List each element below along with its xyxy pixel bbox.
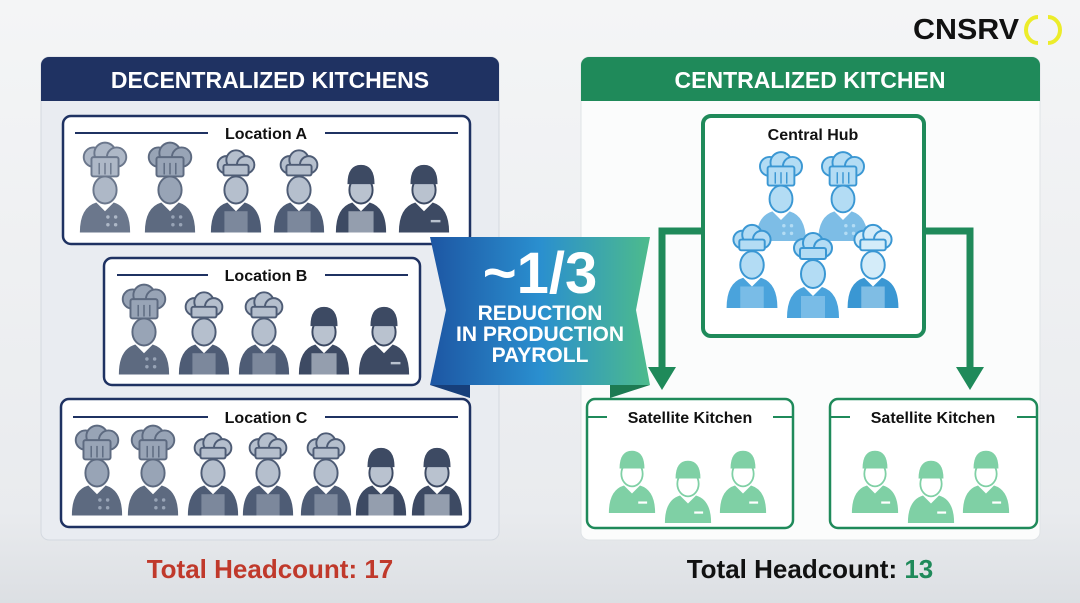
panel: decentralized kitchens (41, 57, 499, 540)
callout: reduction banner: PAYROLL (492, 344, 589, 367)
satellite kitchen 1: Satellite Kitchen (628, 410, 752, 427)
satellite kitchen 1 (587, 399, 793, 528)
callout: reduction banner (430, 237, 650, 398)
location C (61, 399, 470, 527)
logo (913, 14, 1060, 46)
satellite kitchen 2: Satellite Kitchen (871, 410, 995, 427)
heading: decentralized (41, 57, 499, 101)
heading: decentralized: DECENTRALIZED KITCHENS (111, 67, 429, 93)
location B: Location B (225, 268, 307, 285)
callout: reduction banner: IN PRODUCTION (456, 323, 624, 346)
heading: centralized (581, 57, 1040, 101)
location C: Location C (225, 410, 308, 427)
location A (63, 116, 470, 244)
callout: reduction banner: REDUCTION (478, 302, 602, 325)
heading: centralized: CENTRALIZED KITCHEN (675, 67, 945, 93)
callout: reduction banner: ~1/3 (483, 241, 597, 306)
location A: Location A (225, 126, 307, 143)
total headcount: decentralized: Total Headcount: 17 (147, 554, 393, 584)
arrow: left (648, 231, 703, 390)
location B (104, 258, 420, 385)
satellite kitchen 2 (830, 399, 1037, 528)
central hub: Central Hub (768, 127, 859, 144)
total headcount: centralized: Total Headcount: 13 (687, 554, 933, 584)
central hub (703, 116, 924, 336)
logo: CNSRV (913, 14, 1020, 46)
arrow: right (924, 231, 984, 390)
panel: centralized kitchen (581, 57, 1040, 540)
